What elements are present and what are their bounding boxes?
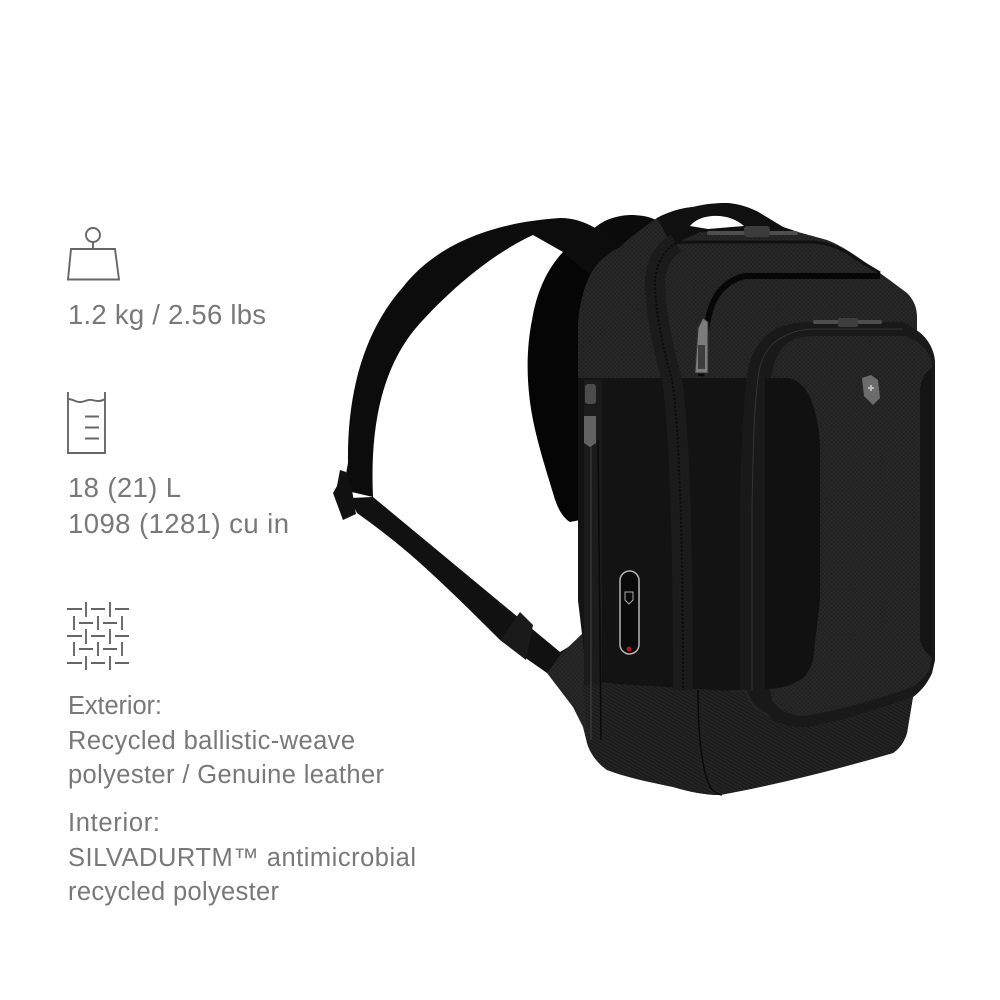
brand shield logo [862,375,880,405]
weight text: 1.2 kg / 2.56 lbs [68,299,266,330]
weight spec [68,228,266,330]
side badge [620,571,639,654]
exterior material text: Recycled ballistic-weave [68,727,355,755]
exterior material text: Exterior: [68,692,162,720]
front pocket fabric [767,336,932,716]
far shoulder strap [585,215,665,260]
upper pocket zipper [701,276,880,376]
upper pocket zipper pull [695,318,708,373]
main body silhouette [547,203,935,795]
volume text: 1098 (1281) cu in [68,508,289,539]
handle opening [690,216,744,229]
strap adjuster [500,612,533,660]
volume text: 18 (21) L [68,472,181,503]
exterior material text [68,692,384,789]
lower shoulder strap [350,497,590,690]
icon: beaker volume [68,392,105,453]
top zipper tape [707,231,798,235]
side zipper pull [584,416,596,447]
front pocket border seam [752,329,903,690]
lower base panel [583,683,913,795]
main zipper band [655,243,683,690]
front pocket inset [765,378,820,689]
carry handle [657,203,798,245]
icon: weight [68,228,119,280]
icon: woven fabric [67,602,129,670]
volume spec [68,392,289,539]
base seam [698,690,722,795]
interior material text: recycled polyester [68,878,280,906]
interior material text: SILVADURTM™ antimicrobial [68,844,416,872]
upper shoulder strap [343,218,625,497]
interior material text [68,809,416,906]
strap buckle [333,470,356,520]
backpack illustration [333,203,935,795]
interior material text: Interior: [68,809,160,837]
top zipper slider [744,226,770,237]
front pocket right strip [920,368,932,658]
materials spec [67,602,416,906]
side pocket zipper [584,380,602,685]
front pocket zipper [813,320,882,324]
dark mid section [578,378,747,692]
front pocket outer border [740,322,935,727]
back padding [528,240,600,522]
main zipper arch [676,242,880,273]
exterior material text: polyester / Genuine leather [68,761,384,789]
volume text [68,472,289,539]
